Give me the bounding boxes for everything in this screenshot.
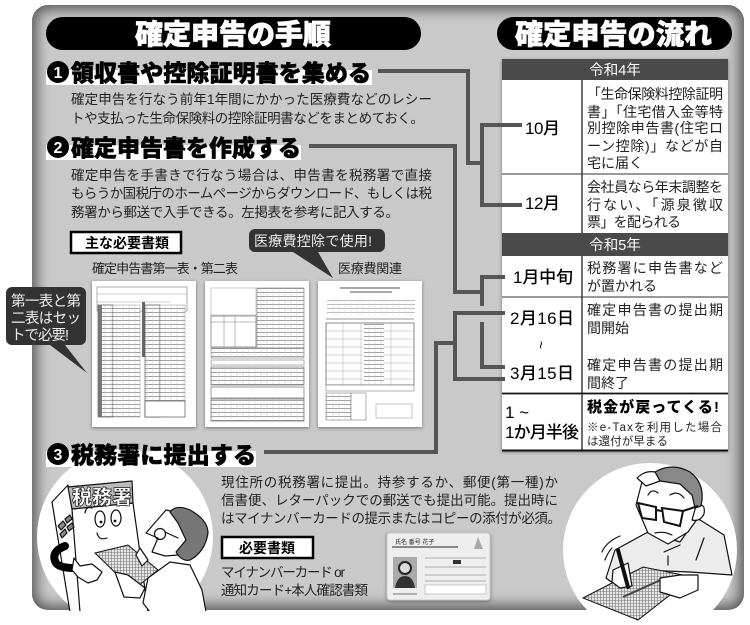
document: form sheet 1 xyxy=(92,281,196,427)
row: December: 会社員なら年末調整を xyxy=(587,179,723,195)
illustration: man filling in a form xyxy=(563,463,737,625)
document: form sheet 2 xyxy=(205,281,309,427)
row: filing period: 確定申告書の提出期 xyxy=(587,357,723,373)
callout: set of sheets: 第一表と第 xyxy=(11,293,81,310)
row: filing period: 3月15日 xyxy=(510,364,574,383)
row: December xyxy=(525,179,723,230)
row: October: 宅に届く xyxy=(587,155,643,171)
row: October: 「生命保険料控除証明 xyxy=(587,86,723,102)
row: refund: 1か月半後 xyxy=(505,423,579,442)
document: medical expense sheet xyxy=(318,281,422,427)
timeline table xyxy=(502,59,728,451)
header: Reiwa 5: 令和5年 xyxy=(589,237,641,254)
head xyxy=(636,470,702,544)
row: October: ーン控除)」などが自 xyxy=(587,138,723,154)
title: procedure: 確定申告の手順 xyxy=(135,19,331,50)
label: required documents xyxy=(222,537,313,558)
required documents text xyxy=(221,565,368,598)
step 1 text xyxy=(71,91,432,126)
row: mid January: が置かれる xyxy=(587,278,657,294)
callout: medical deduction xyxy=(249,229,385,278)
step 3 text: はマイナンバーカードの提示またはコピーの添付が必須。 xyxy=(221,511,561,526)
caption: medical expenses: 医療費関連 xyxy=(338,261,402,276)
label: main documents xyxy=(71,232,181,253)
step 2 text: もらうか国税庁のホームページからダウンロード、もしくは税 xyxy=(71,186,432,201)
row: refund: ※e-Taxを利用した場合 xyxy=(587,421,722,434)
row: mid January: 1月中旬 xyxy=(513,268,573,287)
callout: set of sheets: 二表はセッ xyxy=(11,310,81,327)
connector lines xyxy=(264,71,522,452)
step 3 heading: 税務署に提出する xyxy=(71,442,256,468)
row: December: 行ない、「源泉徴収 xyxy=(587,197,723,213)
row: mid January: 税務署に申告書など xyxy=(587,260,723,276)
row: filing period xyxy=(510,302,723,391)
row: refund: 税金が戻ってくる! xyxy=(587,398,719,416)
row: refund: 1 ~ xyxy=(505,403,529,422)
callout: set of sheets xyxy=(6,287,87,373)
man xyxy=(143,507,208,612)
step 1 heading: 領収書や控除証明書を集める xyxy=(71,60,371,86)
glasses xyxy=(638,503,698,526)
building: 税務署 xyxy=(72,486,132,509)
step 2 text: 務署から郵送で入手できる。左掲表を参考に記入する。 xyxy=(71,205,399,220)
callout: set of sheets: トで必要! xyxy=(11,327,69,344)
title: procedure xyxy=(46,17,421,50)
required documents text: マイナンバーカード or xyxy=(221,565,346,580)
label: required documents: 必要書類 xyxy=(239,540,295,556)
row: filing period: 間開始 xyxy=(587,320,629,336)
label: main documents: 主な必要書類 xyxy=(85,235,169,251)
row: October: 10月 xyxy=(525,119,560,138)
row: October: 別控除申告書(住宅ロ xyxy=(587,120,723,136)
callout: medical deduction: 医療費控除で使用! xyxy=(254,233,372,249)
step 3 text: 信書便、レターパックでの郵送でも提出可能。提出時に xyxy=(221,493,558,508)
step 1 text: 確定申告を行なう前年1年間にかかった医療費などのレシー xyxy=(71,91,432,107)
required documents text: 通知カード+本人確認書類 xyxy=(221,582,368,598)
step 3 heading: 3 xyxy=(54,447,63,464)
row: October: 書」「住宅借入金等特 xyxy=(587,104,723,120)
tax form xyxy=(95,545,158,590)
header: Reiwa 5 xyxy=(502,233,728,256)
row: October xyxy=(525,86,723,171)
row: filing period: 確定申告書の提出期 xyxy=(587,302,723,318)
hair xyxy=(655,467,702,508)
row: refund xyxy=(505,398,722,448)
step 1 text: トや支払った生命保険料の控除証明書などをまとめておく。 xyxy=(71,111,424,126)
icon: my number card: 氏名 番号 花子 xyxy=(395,538,434,546)
hands and pen xyxy=(612,563,632,588)
row: December: 票」を配られる xyxy=(587,214,681,230)
step 3 text xyxy=(221,474,561,526)
row: filing period: 間終了 xyxy=(587,375,629,391)
sweater xyxy=(606,518,732,590)
row: refund: は還付が早まる xyxy=(587,434,668,448)
icon: my number card xyxy=(387,533,490,600)
ear xyxy=(692,505,704,520)
step 2 text xyxy=(71,168,432,220)
step 2 heading: 2 xyxy=(54,140,63,157)
title: flow: 確定申告の流れ xyxy=(515,19,712,50)
step 1 heading: 1 xyxy=(54,65,63,82)
illustration: tax office and man xyxy=(37,449,213,625)
header: Reiwa 4 xyxy=(502,59,728,80)
step 2 text: 確定申告を手書きで行なう場合は、申告書を税務署で直接 xyxy=(71,168,432,183)
building xyxy=(52,481,148,612)
header: Reiwa 4: 令和4年 xyxy=(589,62,641,79)
row: December: 12月 xyxy=(525,194,560,213)
row: filing period: ~ xyxy=(533,341,549,349)
form paper xyxy=(583,567,693,620)
row: filing period: 2月16日 xyxy=(510,309,574,328)
step 3 text: 現住所の税務署に提出。持参するか、郵便(第一種)か xyxy=(221,474,558,490)
step 2 heading: 確定申告書を作成する xyxy=(71,135,301,161)
row: mid January xyxy=(513,260,723,294)
caption: form sheets: 確定申告書第一表・第二表 xyxy=(92,261,238,276)
